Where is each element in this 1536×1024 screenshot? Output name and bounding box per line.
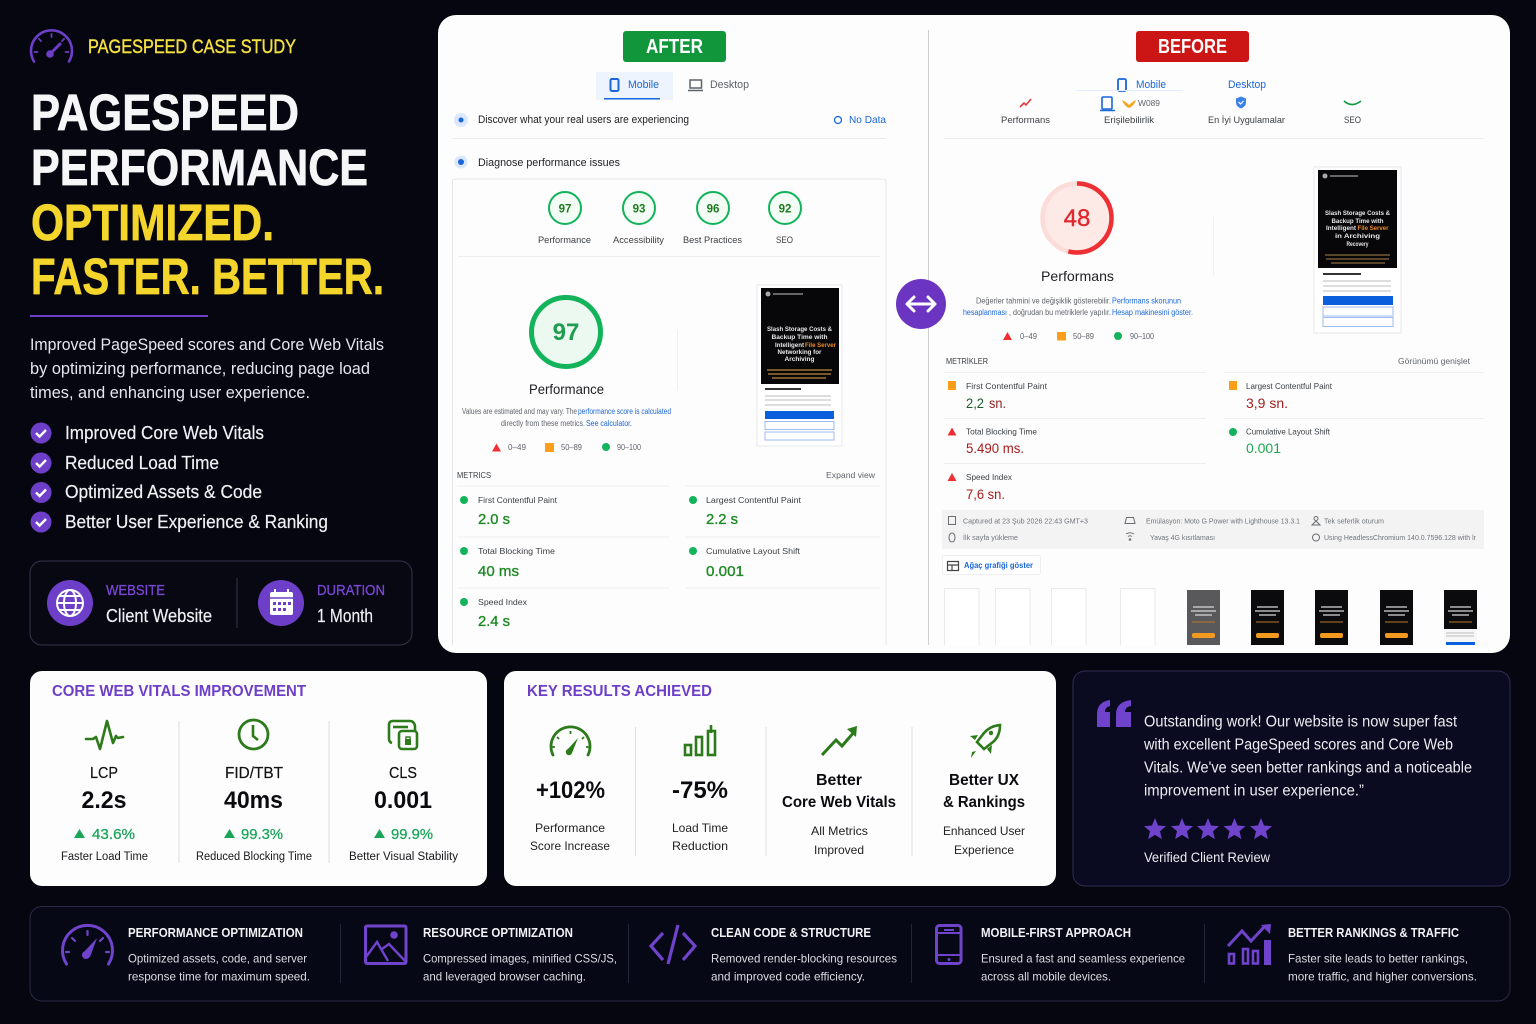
website screenshot: after: Intelligent <box>775 342 805 349</box>
website screenshot: after: Networking for <box>778 349 822 356</box>
website screenshot: before: Recovery <box>1346 241 1369 248</box>
result: load time: Reduction <box>672 839 728 853</box>
device tabs: Mobile <box>628 79 659 91</box>
checklist: Optimized Assets & Code <box>65 482 262 502</box>
score gauges: 92 <box>779 204 791 216</box>
item: mobile-first: across all mobile devices. <box>981 970 1111 984</box>
score note: hesaplanması <box>963 308 1007 317</box>
duration label <box>317 582 385 626</box>
item: mobile-first <box>936 926 1185 984</box>
website label: Client Website <box>106 606 212 626</box>
result: core web vitals: Better <box>816 772 862 789</box>
metrics table: before: Total Blocking Time <box>966 426 1037 436</box>
result: core web vitals <box>782 726 896 857</box>
panel: core web vitals improvement <box>30 671 487 886</box>
result: ux and rankings: Experience <box>954 843 1014 857</box>
metrics table: before <box>944 356 1484 502</box>
result: performance score: +102% <box>536 777 605 804</box>
vital: LCP: Faster Load Time <box>61 851 148 863</box>
metrics table: after: 40 ms <box>478 563 519 580</box>
treemap button: Ağaç grafiği göster <box>964 561 1033 570</box>
test environment band: Emülasyon: Moto G Power with Lighthouse 13.3.1 <box>1146 516 1300 526</box>
panel: left intro column <box>30 30 412 645</box>
test environment band: İlk sayfa yükleme <box>963 533 1018 542</box>
intro paragraph: Improved PageSpeed scores and Core Web Vitals <box>30 335 384 354</box>
website screenshot: before <box>1314 167 1401 333</box>
result: ux and rankings <box>943 725 1025 857</box>
checklist: Improved Core Web Vitals <box>65 423 264 443</box>
category row: W089 <box>1138 99 1161 108</box>
test environment band <box>942 510 1484 549</box>
metrics table: before: 2,2 <box>966 395 984 411</box>
website screenshot: after <box>757 285 842 446</box>
intro paragraph <box>30 335 384 402</box>
title: OPTIMIZED. <box>31 194 274 251</box>
result: load time <box>672 725 728 853</box>
score note: Hesap makinesini göster. <box>1112 308 1193 317</box>
heading: CORE WEB VITALS IMPROVEMENT <box>52 683 306 700</box>
category row: Performans <box>1001 115 1050 126</box>
result: core web vitals: Core Web Vitals <box>782 794 896 811</box>
result: performance score <box>530 727 610 853</box>
score note: See calculator. <box>586 419 632 428</box>
panel: before report <box>942 31 1484 645</box>
item: clean code: CLEAN CODE & STRUCTURE <box>711 926 871 940</box>
item: resource optimization <box>366 926 617 984</box>
score note <box>462 407 671 428</box>
item: clean code <box>651 925 897 984</box>
duration label: DURATION <box>317 582 385 599</box>
real users row: No Data <box>849 114 886 126</box>
score note: Performans skorunun <box>1112 296 1181 306</box>
diagnose heading: Diagnose performance issues <box>478 157 620 169</box>
metrics table: after: Expand view <box>826 470 876 480</box>
score gauges: 96 <box>707 204 719 216</box>
metrics table: after: 2.4 s <box>478 613 510 630</box>
item: clean code: Removed render-blocking resources <box>711 952 897 966</box>
item: performance optimization: Optimized assets, code, and server <box>128 952 307 966</box>
score legend: 90–100 <box>617 443 641 452</box>
result: performance score: Score Increase <box>530 839 610 853</box>
icon: globe <box>47 580 93 626</box>
item: performance optimization: response time for maximum speed. <box>128 970 310 984</box>
badge: after <box>623 31 726 62</box>
test environment band: Using HeadlessChromium 140.0.7596.128 with lr <box>1324 533 1476 542</box>
metrics table: after: 2.0 s <box>478 511 510 528</box>
quote text: with excellent PageSpeed scores and Core Web <box>1143 736 1453 754</box>
website screenshot: before: Backup Time with <box>1332 218 1384 225</box>
score note <box>963 296 1193 317</box>
score note: Values are estimated and may vary. The <box>462 407 577 416</box>
icon: quote mark <box>1097 700 1131 727</box>
result: ux and rankings: & Rankings <box>943 794 1025 811</box>
score legend <box>492 443 641 452</box>
vital: FID/TBT: 40ms <box>224 787 283 814</box>
result: performance score: Performance <box>535 821 605 835</box>
metrics table: after: Cumulative Layout Shift <box>706 546 801 556</box>
panel: key results achieved <box>504 671 1056 886</box>
metrics table: after: First Contentful Paint <box>478 495 558 505</box>
score gauges: Best Practices <box>683 235 742 246</box>
metrics table: after: Speed Index <box>478 597 528 607</box>
vital: FID/TBT: FID/TBT <box>225 765 283 782</box>
metrics table: after: Total Blocking Time <box>478 546 555 556</box>
metrics table: before: METRİKLER <box>946 356 988 366</box>
star rating <box>1144 818 1272 839</box>
website screenshot: before: Slash Storage Costs & <box>1325 210 1390 217</box>
metrics table: before: First Contentful Paint <box>966 381 1048 391</box>
metrics table: before: Görünümü genişlet <box>1398 356 1471 366</box>
score gauges: 93 <box>633 204 645 216</box>
score gauges <box>538 192 801 246</box>
metrics table: before: Speed Index <box>966 472 1013 482</box>
result: core web vitals: All Metrics <box>811 824 868 838</box>
test environment band: Yavaş 4G kısıtlaması <box>1150 533 1215 542</box>
metrics table: after: Largest Contentful Paint <box>706 495 802 505</box>
item: better rankings: Faster site leads to better rankings, <box>1288 952 1468 966</box>
vital: LCP: 2.2s <box>82 787 126 814</box>
title <box>31 84 384 305</box>
vital: FID/TBT <box>196 720 312 863</box>
category row: En İyi Uygulamalar <box>1208 115 1285 126</box>
website screenshot: after: Backup Time with <box>772 334 828 341</box>
vital: FID/TBT: Reduced Blocking Time <box>196 851 312 863</box>
score gauges: Performance <box>538 235 591 246</box>
score legend: 0–49 <box>1020 332 1038 341</box>
result: ux and rankings: Better UX <box>949 772 1019 789</box>
badge: after: AFTER <box>646 36 703 58</box>
item: mobile-first: Ensured a fast and seamless experience <box>981 952 1185 966</box>
item: performance optimization: PERFORMANCE OPTIMIZATION <box>128 926 303 940</box>
panel: after report <box>452 31 886 645</box>
score legend: 50–89 <box>561 443 583 452</box>
metrics table: before: 5.490 ms. <box>966 440 1024 456</box>
real users row <box>452 113 886 138</box>
item: resource optimization: Compressed images, minified CSS/JS, <box>423 952 617 966</box>
score gauges: SEO <box>776 235 793 246</box>
panel: client testimonial <box>1073 671 1510 886</box>
quote text: Vitals. We've seen better rankings and a noticeable <box>1144 760 1472 776</box>
result: ux and rankings: Enhanced User <box>943 824 1025 838</box>
metrics table: before: 3,9 sn. <box>1246 395 1288 411</box>
vital: FID/TBT: 99.3% <box>241 826 283 843</box>
metrics table: after: 0.001 <box>706 563 744 580</box>
vital: LCP <box>61 721 148 863</box>
arrow: before/after swap <box>896 279 946 329</box>
category row <box>944 96 1484 138</box>
badge: before <box>1136 31 1249 62</box>
metrics table: after: 2.2 s <box>706 511 738 528</box>
item: better rankings: BETTER RANKINGS & TRAFFIC <box>1288 926 1459 940</box>
metrics table: before: sn. <box>989 395 1006 411</box>
vital: CLS: 99.9% <box>391 826 433 843</box>
item: clean code: and improved code efficiency. <box>711 970 865 984</box>
panel: before and after comparison <box>438 15 1510 653</box>
metrics table: before: 7,6 sn. <box>966 486 1005 502</box>
item: better rankings <box>1228 924 1477 984</box>
score legend: 90–100 <box>1130 332 1154 341</box>
icon: speedometer <box>31 30 72 62</box>
metrics table: after: METRICS <box>457 470 491 480</box>
result: load time: Load Time <box>672 821 728 835</box>
item: mobile-first: MOBILE-FIRST APPROACH <box>981 926 1131 940</box>
vital: CLS <box>349 721 458 863</box>
item: resource optimization: RESOURCE OPTIMIZATION <box>423 926 573 940</box>
score note: , doğrudan bu metriklerle yapılır. <box>1009 308 1111 317</box>
title: FASTER. BETTER. <box>31 248 384 305</box>
result: load time: -75% <box>672 777 728 804</box>
website label <box>106 582 212 626</box>
score gauges: Accessibility <box>613 235 664 246</box>
score legend: 0–49 <box>508 443 527 452</box>
score gauges: 97 <box>559 204 571 216</box>
real users row: Discover what your real users are experiencing <box>478 114 689 126</box>
main score gauge: 48: 48 <box>1064 205 1090 232</box>
vital: CLS: 0.001 <box>374 787 432 814</box>
duration label: 1 Month <box>317 606 373 626</box>
main score gauge: 97: Performance <box>529 381 604 397</box>
score note: performance score is calculated <box>578 407 671 416</box>
score note: directly from these metrics. <box>501 419 585 428</box>
category row: Erişilebilirlik <box>1104 115 1154 126</box>
metrics table: before: 0.001 <box>1246 440 1281 456</box>
score note: Değerler tahmini ve değişiklik gösterebilir. <box>976 296 1111 306</box>
item: resource optimization: and leveraged browser caching. <box>423 970 586 984</box>
result: core web vitals: Improved <box>814 843 864 857</box>
panel: optimization strip <box>30 906 1510 1001</box>
website label: WEBSITE <box>106 582 165 599</box>
website screenshot: before: File Server <box>1358 225 1389 232</box>
score legend: 50–89 <box>1073 332 1095 341</box>
item: better rankings: more traffic, and higher conversions. <box>1288 970 1477 984</box>
checklist: Better User Experience & Ranking <box>65 512 328 532</box>
category row: SEO <box>1344 115 1361 126</box>
test environment band: Captured at 23 Şub 2026 22:43 GMT+3 <box>963 516 1088 526</box>
device tabs: Mobile <box>1136 79 1166 91</box>
website screenshot: before: Intelligent <box>1326 225 1357 232</box>
panel: project info <box>30 561 412 645</box>
metrics table: after <box>457 470 880 630</box>
attribution: Verified Client Review <box>1144 849 1271 865</box>
vital: LCP: LCP <box>90 765 118 782</box>
device tabs <box>596 72 749 100</box>
icon: calendar <box>258 580 304 626</box>
filmstrip <box>944 588 1477 645</box>
main score gauge: 97 <box>529 298 604 397</box>
website screenshot: before: in Archiving <box>1335 233 1380 240</box>
quote text: improvement in user experience.” <box>1144 782 1364 800</box>
website screenshot: after: Slash Storage Costs & <box>767 326 832 333</box>
device tabs: Desktop <box>1228 79 1266 91</box>
quote text: Outstanding work! Our website is now super fast <box>1144 714 1458 730</box>
website screenshot: after: Archiving <box>784 356 815 363</box>
vital: LCP: 43.6% <box>92 826 135 843</box>
checklist <box>30 422 328 532</box>
treemap button <box>942 556 1040 574</box>
eyebrow label: PAGESPEED CASE STUDY <box>88 37 296 58</box>
vital: CLS: CLS <box>389 765 417 782</box>
test environment band: Tek seferlik oturum <box>1324 516 1384 526</box>
title: PAGESPEED <box>31 84 299 141</box>
main score gauge: 48: Performans <box>1041 268 1114 284</box>
item: performance optimization <box>62 925 310 984</box>
device tabs: Desktop <box>710 79 749 91</box>
title: PERFORMANCE <box>31 139 368 196</box>
vital: CLS: Better Visual Stability <box>349 851 458 863</box>
device tabs <box>1076 79 1266 91</box>
quote text <box>1143 714 1472 800</box>
main score gauge: 48 <box>1041 184 1114 284</box>
badge: before: BEFORE <box>1158 36 1227 58</box>
score legend <box>1003 332 1154 341</box>
main score gauge: 97: 97 <box>553 319 579 346</box>
intro paragraph: by optimizing performance, reducing page load <box>30 359 370 378</box>
metrics table: before: Largest Contentful Paint <box>1246 381 1333 391</box>
intro paragraph: times, and enhancing user experience. <box>30 383 310 402</box>
heading: KEY RESULTS ACHIEVED <box>527 683 712 700</box>
website screenshot: after: File Server <box>805 342 836 349</box>
checklist: Reduced Load Time <box>65 453 219 473</box>
metrics table: before: Cumulative Layout Shift <box>1246 426 1331 436</box>
